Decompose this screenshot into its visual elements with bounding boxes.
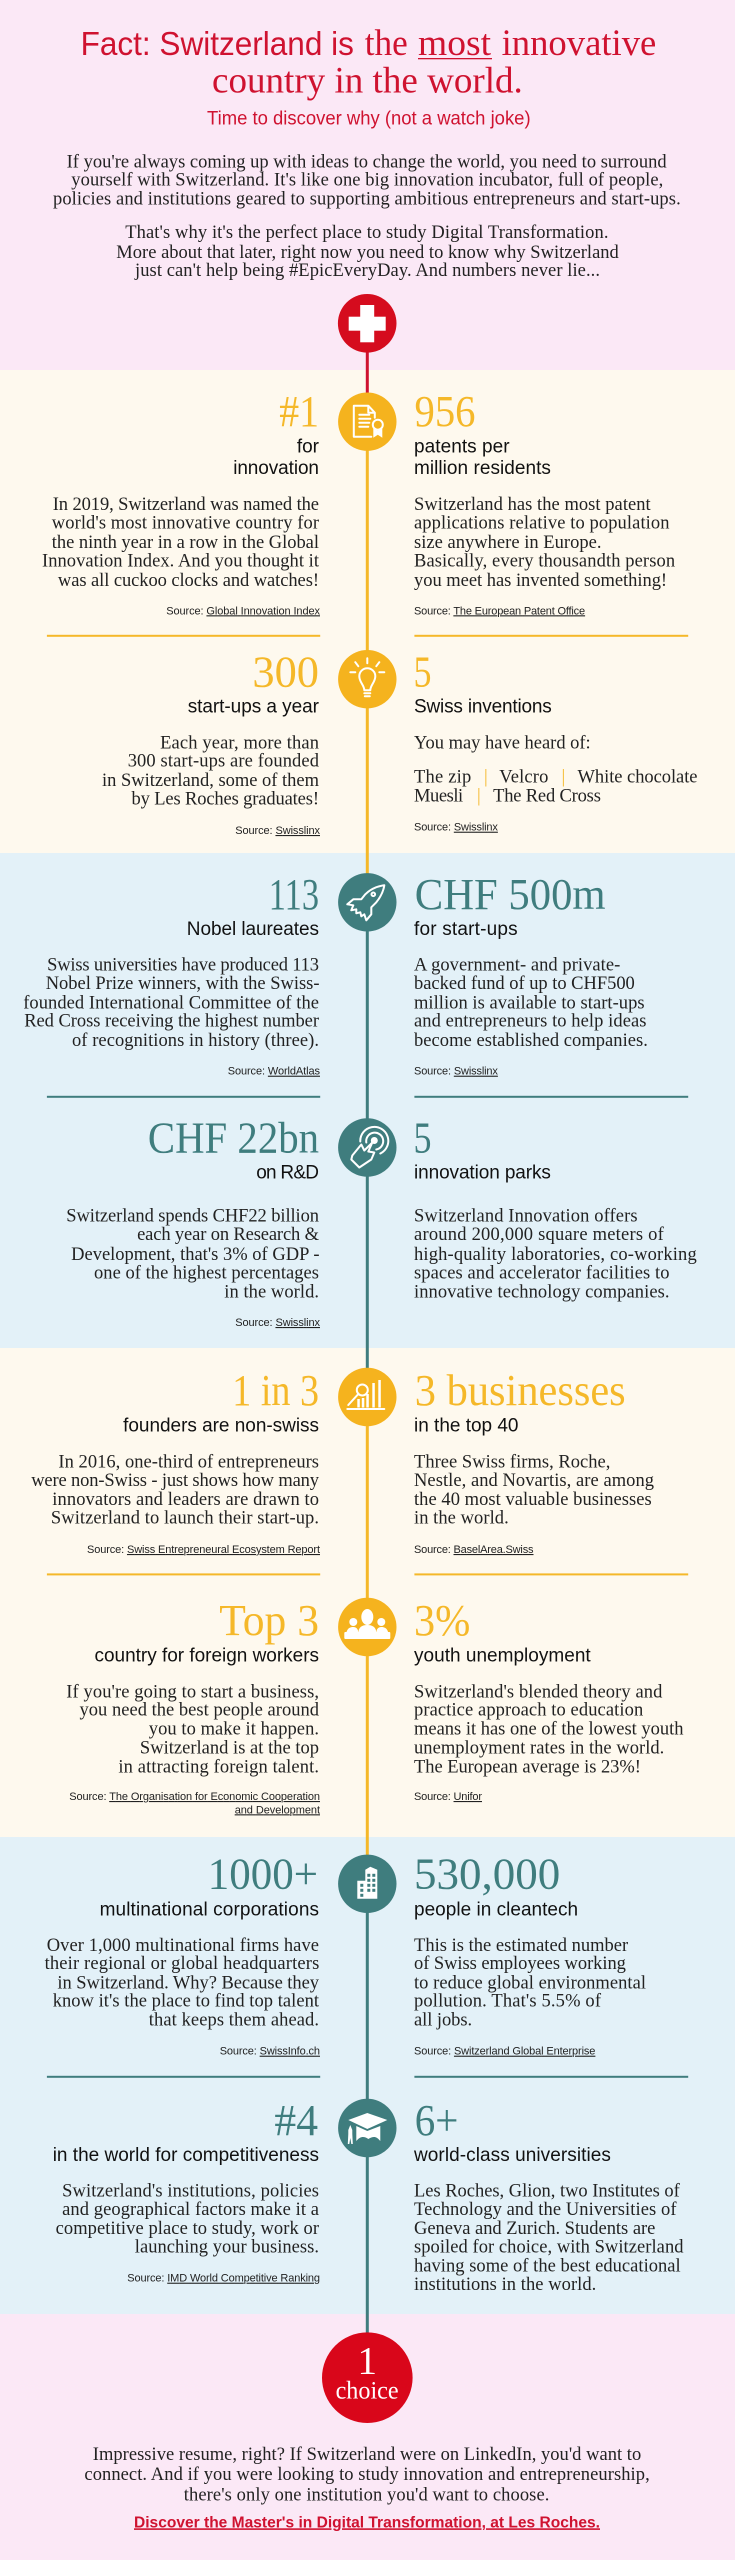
stat: 3%: 3% (414, 1596, 470, 1645)
panel: blue section one (0, 853, 735, 1348)
stat: 1 in 3: 1 in 3 (232, 1366, 319, 1415)
body text: were non-Swiss - just shows how many (31, 1471, 320, 1491)
source: Source: Swisslinx (235, 825, 320, 837)
body text: spaces and accelerator facilities to (414, 1263, 670, 1283)
body text (414, 1682, 684, 1778)
block: 956 patents (414, 387, 675, 617)
body text: of Swiss employees working (414, 1954, 626, 1974)
stat: 6+: 6+ (415, 2096, 458, 2145)
body text: high-quality laboratories, co-working (414, 1245, 697, 1265)
body text: you need the best people around (80, 1701, 320, 1721)
label: on R&D: on R&D (256, 1163, 319, 1184)
body text: Nestle, and Novartis, are among (414, 1471, 654, 1491)
body text (45, 1936, 320, 2031)
body text: The European average is 23%! (414, 1758, 641, 1778)
block: 3% youth unemployment (414, 1596, 684, 1803)
body text: Switzerland spends CHF22 billion (66, 1207, 319, 1227)
closing text: Impressive resume, right? If Switzerland were on LinkedIn, you'd want to (93, 2445, 641, 2465)
icon: rocket (338, 873, 396, 932)
icon: people (338, 1598, 396, 1656)
body text (66, 1207, 320, 1302)
body text (66, 1682, 320, 1778)
block: #4 competitiveness (53, 2096, 320, 2285)
icon: touch hand (338, 1118, 396, 1177)
intro text: yourself with Switzerland. It's like one big innovation incubator, full of people, (71, 170, 663, 190)
body text: White chocolate (578, 767, 698, 787)
icon: chart and magnifier (338, 1368, 396, 1426)
label: patents per million residents: million residents (414, 458, 551, 479)
body text: unemployment rates in the world. (414, 1738, 664, 1758)
stat: 113: 113 (269, 870, 319, 919)
source: Source: Global Innovation Index (166, 605, 320, 617)
icon: office building (338, 1855, 396, 1913)
label: founders are non-swiss: founders are non-swiss (123, 1415, 319, 1436)
body text: Switzerland is at the top (140, 1738, 319, 1758)
body text: Basically, every thousandth person (414, 552, 675, 572)
body text: Three Swiss firms, Roche, (414, 1453, 610, 1473)
body text: and geographical factors make it a (62, 2200, 319, 2220)
body text: Velcro (499, 767, 548, 787)
body text: the ninth year in a row in the Global (52, 533, 319, 553)
body text: Development, that's 3% of GDP - (71, 1245, 320, 1265)
panel: cream section one (0, 370, 735, 853)
label: youth unemployment: youth unemployment (414, 1646, 591, 1667)
label: nobel laureates: Nobel laureates (187, 919, 319, 940)
intro text: If you're always coming up with ideas to change the world, you need to surround (67, 152, 667, 172)
body text: You may have heard of: (414, 733, 591, 753)
title (81, 23, 656, 102)
intro text: More about that later, right now you need to know why Switzerland (116, 243, 620, 263)
body text: around 200,000 square meters of (414, 1225, 665, 1245)
body text: Les Roches, Glion, two Institutes of (414, 2182, 681, 2202)
body text (31, 1453, 320, 1528)
block: 1 in 3 founders (31, 1366, 320, 1556)
stat: 3 businesses: 3 businesses (415, 1366, 626, 1415)
body text: backed fund of up to CHF500 (414, 974, 635, 994)
intro text: just can't help being #EpicEveryDay. And numbers never lie... (134, 261, 600, 281)
body text: of recognitions in history (three). (72, 1031, 319, 1051)
body text: world's most innovative country for (52, 514, 319, 534)
body text: know it's the place to find top talent (53, 1992, 320, 2012)
body text: This is the estimated number (414, 1936, 628, 1956)
label: patents per million residents: patents per (414, 436, 510, 457)
body text: Nobel Prize winners, with the Swiss- (46, 974, 320, 994)
body text: Over 1,000 multinational firms have (47, 1936, 319, 1956)
block: 530,000 people in cleantech (414, 1849, 646, 2058)
label: for innovation: for (297, 436, 320, 457)
body text: Innovation Index. And you thought it (42, 552, 320, 572)
label: multinational corporations: multinational corporations (100, 1899, 319, 1920)
source: Source: Swisslinx (414, 1066, 498, 1078)
body text: In 2016, one-third of entrepreneurs (58, 1453, 319, 1473)
body text: | (484, 767, 488, 787)
body text: and entrepreneurs to help ideas (414, 1012, 646, 1032)
body text: innovative technology companies. (414, 1282, 670, 1302)
stat: CHF 500m: CHF 500m (415, 870, 606, 919)
source: Source: Switzerland Global Enterprise (414, 2046, 595, 2058)
call to action link: Discover the Master's in Digital Transformation, at Les Roches. (134, 2514, 600, 2531)
body text: founded International Committee of the (23, 993, 319, 1013)
block: 1000+ multinational corporations (45, 1849, 320, 2058)
body text: Switzerland's institutions, policies (62, 2182, 319, 2202)
body text: in the world. (414, 1508, 509, 1528)
label: in the top 40: in the top 40 (414, 1415, 518, 1436)
body text (414, 1936, 646, 2031)
stat: 5: 5 (414, 1114, 432, 1163)
body text (414, 1207, 697, 1302)
closing badge: 1 choice: choice (336, 2377, 399, 2404)
body text: Geneva and Zurich. Students are (414, 2219, 655, 2239)
intro text (53, 152, 681, 281)
panel: intro (0, 0, 735, 370)
source: Source: The Organisation for Economic Cooperation (69, 1791, 320, 1803)
label: people in cleantech: people in cleantech (414, 1899, 578, 1920)
body text: applications relative to population (414, 514, 670, 534)
source: Source: BaselArea.Swiss (414, 1544, 534, 1556)
body text: The zip (414, 767, 471, 787)
label: country for foreign workers: country for foreign workers (94, 1646, 319, 1667)
body text (42, 495, 320, 591)
timeline line (366, 350, 369, 2334)
body text: Each year, more than (160, 733, 319, 753)
block: 5 swiss inventions (414, 648, 698, 834)
label: for innovation: innovation (233, 458, 319, 479)
body text: one of the highest percentages (94, 1263, 319, 1283)
body text: to reduce global environmental (414, 1973, 646, 1993)
body text: you meet has invented something! (414, 571, 667, 591)
stat: CHF 22bn: CHF 22bn (148, 1114, 319, 1163)
body text: The Red Cross (493, 786, 601, 806)
block: 113 nobel laureates (23, 870, 320, 1078)
body text: If you're going to start a business, (66, 1682, 319, 1702)
stat: Top 3: Top 3 (219, 1596, 319, 1645)
panel: cream section two (0, 1348, 735, 1837)
source: Source: WorldAtlas (228, 1066, 320, 1078)
body text: pollution. That's 5.5% of (414, 1992, 602, 2012)
body text: 300 start-ups are founded (128, 752, 320, 772)
body text (414, 1453, 654, 1528)
body text: practice approach to education (414, 1701, 643, 1721)
block: CHF 500m for start-ups (414, 870, 648, 1078)
body text: | (562, 767, 565, 787)
block: 6+ world-class universities (413, 2096, 684, 2295)
body text (102, 733, 320, 810)
label: for start-ups: for start-ups (414, 919, 518, 940)
body text (23, 956, 320, 1051)
body text: you to make it happen. (149, 1720, 319, 1740)
stat: #4: #4 (274, 2096, 318, 2145)
body text: that keeps them ahead. (149, 2011, 319, 2031)
stat: 956: 956 (414, 387, 476, 436)
intro text: policies and institutions geared to supporting ambitious entrepreneurs and start-ups. (53, 190, 681, 210)
body text (414, 956, 648, 1051)
stat: 530,000: 530,000 (414, 1849, 560, 1898)
body text: size anywhere in Europe. (414, 533, 602, 553)
body text: was all cuckoo clocks and watches! (58, 571, 319, 591)
intro text: That's why it's the perfect place to study Digital Transformation. (125, 223, 608, 243)
label: swiss inventions: Swiss inventions (414, 697, 552, 718)
body text: the 40 most valuable businesses (414, 1490, 652, 1510)
body text: competitive place to study, work or (56, 2219, 319, 2239)
body text: Switzerland Innovation offers (414, 1207, 638, 1227)
body text: Muesli (414, 786, 463, 806)
body text: their regional or global headquarters (45, 1954, 319, 1974)
body text: in attracting foreign talent. (118, 1758, 319, 1778)
source: Source: Swisslinx (235, 1317, 320, 1329)
closing badge: 1 choice (322, 2332, 413, 2423)
source: Source: Swisslinx (414, 822, 498, 834)
body text: by Les Roches graduates! (132, 790, 319, 810)
block: #1 for innovation (42, 387, 320, 617)
icon: patent document (338, 392, 396, 451)
body text: million is available to start-ups (414, 993, 645, 1013)
body text: having some of the best educational (414, 2257, 681, 2277)
body text: | (477, 786, 481, 806)
source: Source: IMD World Competitive Ranking (127, 2273, 320, 2285)
body text: Swiss universities have produced 113 (47, 956, 319, 976)
icon: swiss cross (338, 294, 397, 353)
panel: closing background (0, 2314, 735, 2560)
subtitle: Time to discover why (not a watch joke) (207, 108, 531, 129)
body text: Technology and the Universities of (414, 2200, 677, 2220)
title: the (365, 23, 408, 64)
title: innovative (502, 23, 656, 64)
closing text: there's only one institution you'd want to choose. (184, 2486, 549, 2506)
stat: 5: 5 (414, 648, 432, 697)
body text: each year on Research & (137, 1225, 320, 1245)
label: patents per million residents (414, 436, 551, 479)
source: Source: The European Patent Office (414, 605, 585, 617)
closing text (84, 2445, 650, 2506)
source: Source: Swiss Entrepreneural Ecosystem Report (87, 1544, 320, 1556)
body text: in Switzerland, some of them (102, 771, 320, 791)
body text: means it has one of the lowest youth (414, 1720, 684, 1740)
block: 300 start-ups (102, 648, 320, 837)
body text: innovators and leaders are drawn to (52, 1490, 319, 1510)
source: Source: SwissInfo.ch (220, 2046, 320, 2058)
title: Fact: Switzerland is (81, 25, 354, 62)
source (69, 1791, 320, 1816)
label: for innovation (233, 436, 320, 479)
label: innovation parks: innovation parks (414, 1163, 551, 1184)
body text: launching your business. (135, 2238, 319, 2258)
body text: A government- and private- (414, 956, 620, 976)
title: country in the world. (212, 61, 523, 102)
block: top 3 foreign workers (66, 1596, 320, 1816)
body text (56, 2182, 319, 2258)
body text: become established companies. (414, 1031, 648, 1051)
icon: light bulb (338, 650, 396, 708)
body text: all jobs. (414, 2011, 472, 2031)
label: start-ups a year: start-ups a year (188, 697, 320, 718)
source: Source: Unifor (414, 1791, 482, 1803)
panel: blue section two (0, 1837, 735, 2314)
body text: Switzerland to launch their start-up. (51, 1508, 319, 1528)
label: world-class universities: world-class universities (413, 2145, 611, 2166)
body text: In 2019, Switzerland was named the (53, 495, 319, 515)
body text (414, 2182, 684, 2295)
body text (414, 733, 698, 806)
closing badge: 1 choice: 1 (358, 2339, 377, 2382)
body text: in the world. (224, 1282, 319, 1302)
block: CHF 22bn on R&D (66, 1114, 320, 1329)
stat: 1000+: 1000+ (208, 1849, 318, 1898)
source: and Development (235, 1804, 320, 1816)
title: most (418, 23, 492, 64)
label: in the world for competitiveness: in the world for competitiveness (53, 2145, 319, 2166)
body text: institutions in the world. (414, 2275, 596, 2295)
closing text: connect. And if you were looking to study innovation and entrepreneurship, (84, 2465, 650, 2485)
body text: Switzerland has the most patent (414, 495, 652, 515)
body text (414, 495, 675, 591)
icon: graduation cap (338, 2099, 396, 2157)
block: 5 innovation parks (414, 1114, 697, 1302)
body text: Switzerland's blended theory and (414, 1682, 663, 1702)
block: 3 businesses (414, 1366, 654, 1556)
body text: in Switzerland. Why? Because they (57, 1973, 320, 1993)
body text: Red Cross receiving the highest number (24, 1012, 319, 1032)
stat: 300: 300 (252, 648, 319, 697)
body text: spoiled for choice, with Switzerland (414, 2238, 684, 2258)
stat: #1: #1 (279, 387, 319, 436)
